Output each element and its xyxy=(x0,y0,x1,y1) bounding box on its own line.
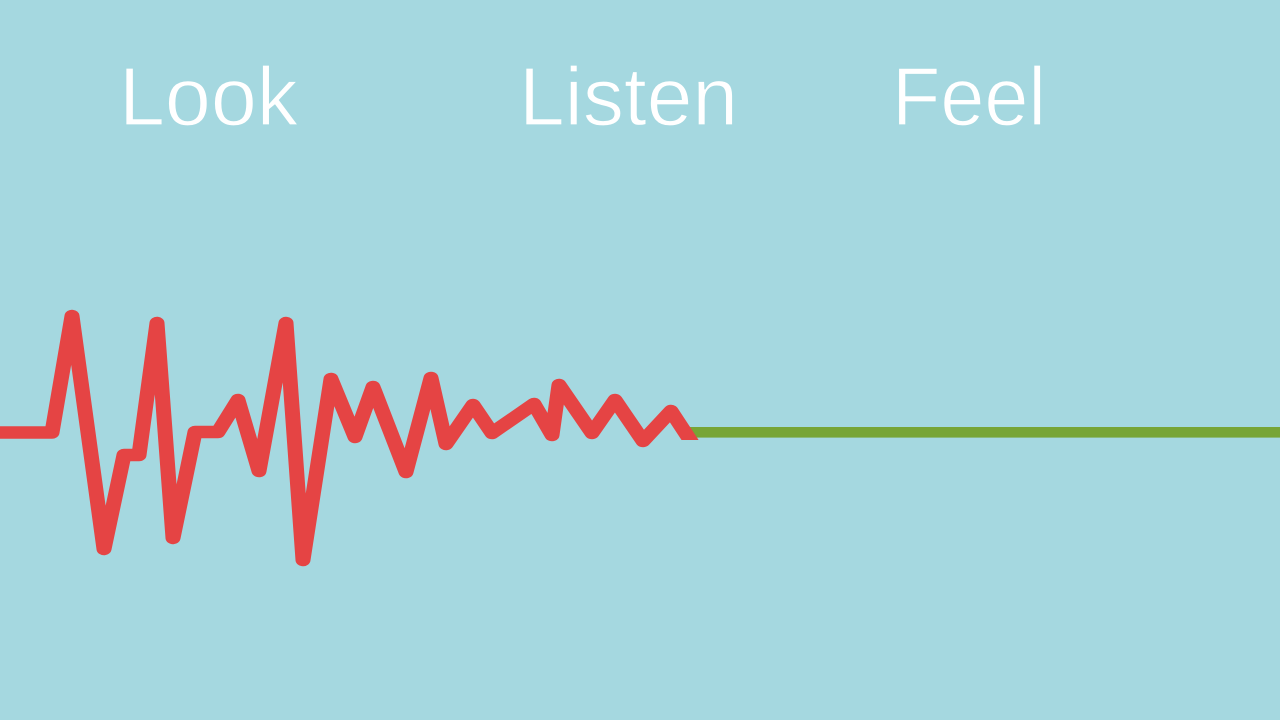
heading: Listen: Listen xyxy=(519,50,738,143)
green flat line xyxy=(690,427,1280,438)
heading: Feel: Feel xyxy=(892,50,1046,143)
red erratic pulse line xyxy=(0,316,694,560)
infographic canvas xyxy=(0,66,1280,566)
heading: Look: Look xyxy=(119,50,298,143)
